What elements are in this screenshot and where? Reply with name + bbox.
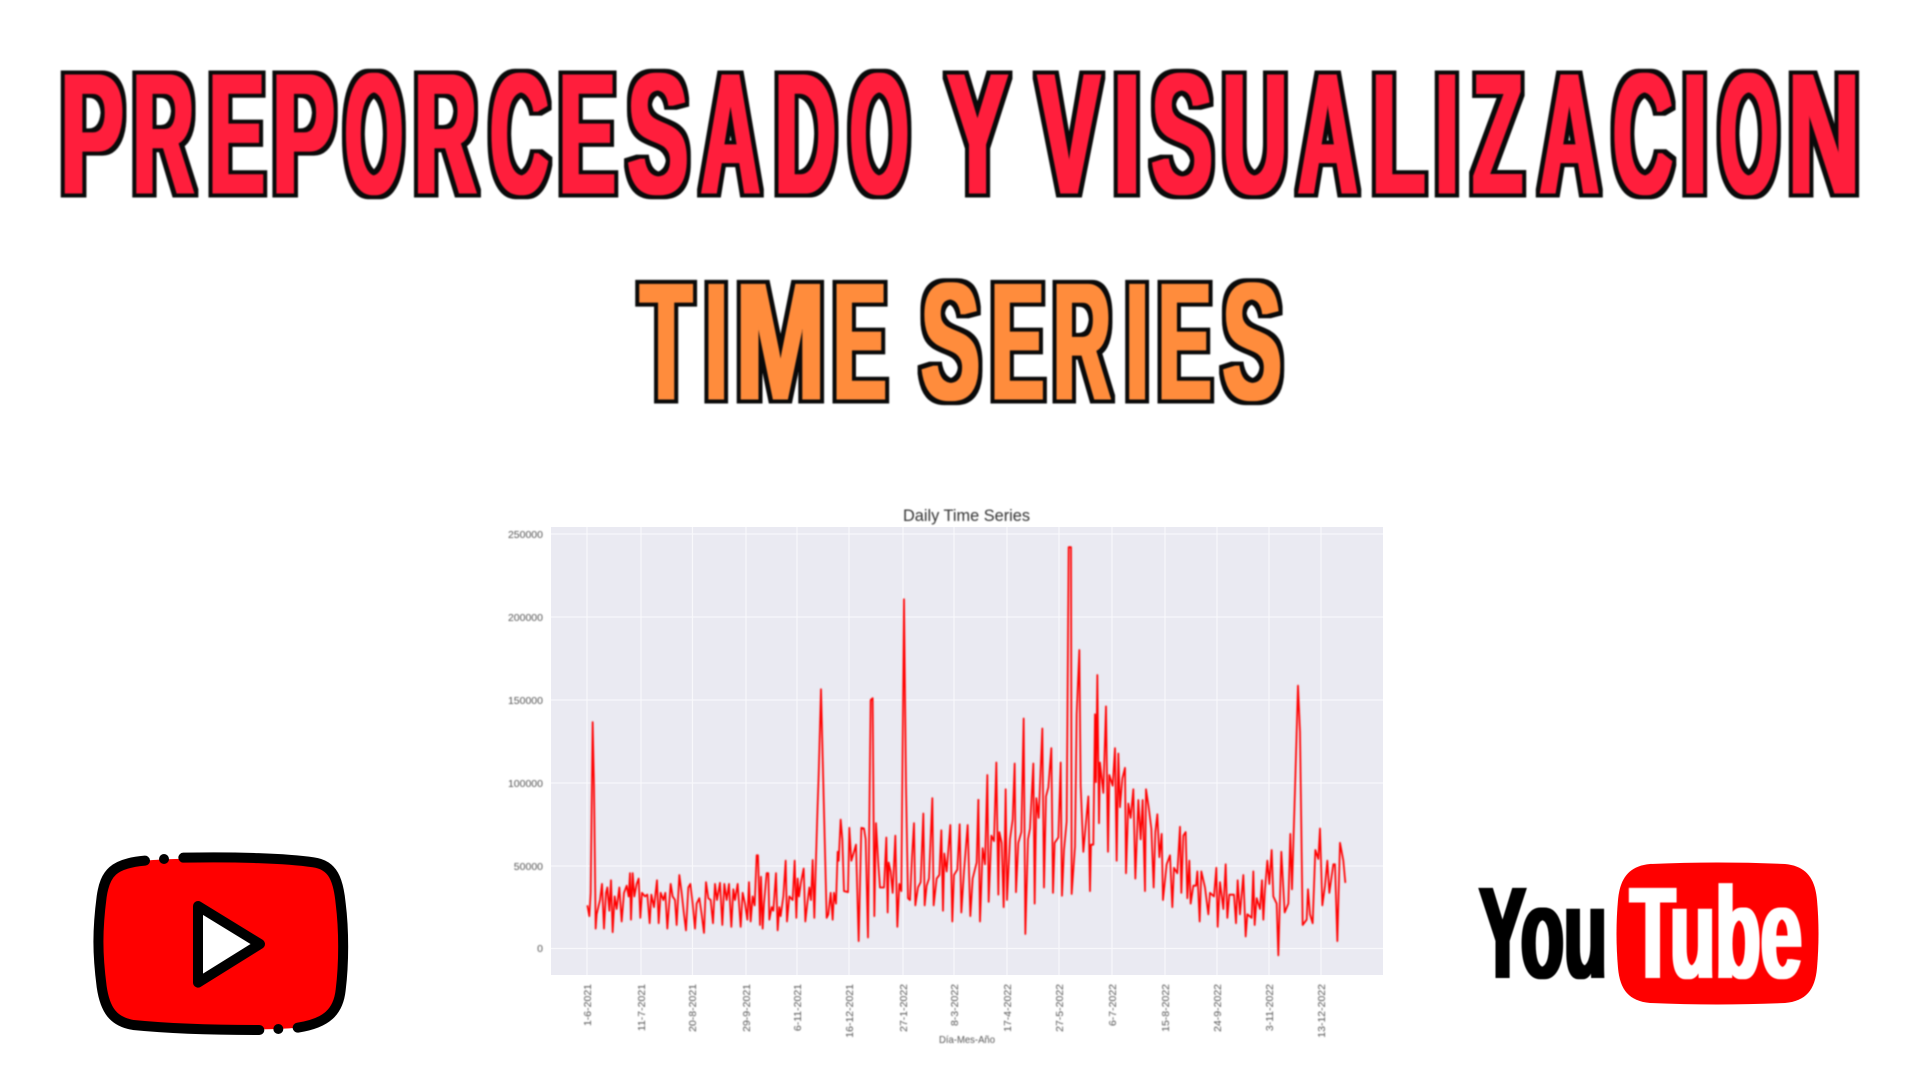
x axis labels: 1-6-2021 (582, 984, 594, 1026)
y axis title: Ventas (497, 735, 509, 767)
title: Preporcesado y Visualizacion: L (1372, 36, 1425, 230)
logo: YouTube (1479, 859, 1818, 1006)
subtitle: Time Series (640, 248, 1282, 436)
subtitle: Time Series: E (833, 248, 886, 436)
icon outline (98, 857, 343, 1030)
title: Preporcesado y Visualizacion: U (1222, 36, 1288, 230)
x axis labels: 20-8-2021 (687, 984, 699, 1032)
title: Preporcesado y Visualizacion: P (272, 36, 335, 230)
x axis labels: 17-4-2022 (1002, 984, 1014, 1032)
subtitle: Time Series: E (1158, 248, 1211, 436)
y axis labels: 200000 (508, 612, 543, 624)
data line (587, 547, 1345, 955)
y axis labels: 0 (537, 943, 543, 955)
x axis labels: 13-12-2022 (1316, 984, 1328, 1038)
title: Preporcesado y Visualizacion: E (209, 36, 264, 230)
title: Preporcesado y Visualizacion: N (1788, 36, 1860, 230)
title: Preporcesado y Visualizacion: C (1613, 36, 1673, 230)
logo red badge (1616, 862, 1818, 1004)
subtitle: Time Series: I (1126, 248, 1149, 436)
x axis labels: 27-5-2022 (1054, 984, 1066, 1032)
title: Preporcesado y Visualizacion: A (1298, 36, 1358, 230)
x axis labels: 15-8-2022 (1160, 984, 1172, 1032)
title: Preporcesado y Visualizacion: V (1038, 36, 1100, 230)
subtitle: Time Series: S (1222, 248, 1282, 436)
title: Preporcesado y Visualizacion: R (414, 36, 477, 230)
subtitle: Time Series: M (736, 248, 825, 436)
x axis labels (582, 984, 1328, 1038)
subtitle: Time Series: I (705, 248, 728, 436)
x axis labels: 8-3-2022 (949, 984, 961, 1026)
y axis labels: 100000 (508, 778, 543, 790)
icon body (98, 858, 343, 1029)
y axis labels: 50000 (514, 861, 543, 873)
x axis labels: 27-1-2022 (898, 984, 910, 1032)
title: Preporcesado y Visualizacion: O (1719, 36, 1778, 230)
title: Preporcesado y Visualizacion: S (627, 36, 688, 230)
title: Preporcesado y Visualizacion: A (1540, 36, 1599, 230)
title: Preporcesado y Visualizacion: C (490, 36, 549, 230)
plot area (551, 527, 1383, 975)
title: Preporcesado y Visualizacion: P (60, 36, 124, 230)
x axis title: Día-Mes-Año (939, 1034, 995, 1046)
title: Preporcesado y Visualizacion: S (1151, 36, 1213, 230)
title: Preporcesado y Visualizacion: Z (1473, 36, 1523, 230)
title: Preporcesado y Visualizacion: E (559, 36, 616, 230)
x axis labels: 29-9-2021 (741, 984, 753, 1032)
title: Preporcesado y Visualizacion (60, 36, 1860, 230)
title: Preporcesado y Visualizacion: A (701, 36, 760, 230)
subtitle: Time Series: E (991, 248, 1044, 436)
subtitle: Time Series: R (1053, 248, 1111, 436)
y axis labels (508, 529, 543, 955)
title: Preporcesado y Visualizacion: I (1682, 36, 1707, 230)
title: Preporcesado y Visualizacion: D (775, 36, 836, 230)
x axis labels: 11-7-2021 (636, 984, 648, 1031)
title: Preporcesado y Visualizacion: O (345, 36, 403, 230)
chart: daily time series (497, 507, 1383, 1046)
title: Preporcesado y Visualizacion: I (1435, 36, 1459, 230)
subtitle: Time Series: T (640, 248, 692, 436)
title: Preporcesado y Visualizacion: R (133, 36, 194, 230)
x axis labels: 3-11-2022 (1264, 984, 1276, 1031)
subtitle: Time Series: S (921, 248, 980, 436)
title: Preporcesado y Visualizacion: O (850, 36, 909, 230)
title: Preporcesado y Visualizacion: I (1113, 36, 1141, 230)
chart title: Daily Time Series (903, 507, 1030, 525)
y axis labels: 250000 (508, 529, 543, 541)
y axis labels: 150000 (508, 695, 543, 707)
x axis labels: 6-11-2021 (792, 984, 804, 1031)
x axis labels: 24-9-2022 (1212, 984, 1224, 1032)
x axis labels: 6-7-2022 (1107, 984, 1119, 1026)
x axis labels: 16-12-2021 (844, 984, 856, 1038)
icon: play button (98, 854, 343, 1034)
logo word: You: You (1479, 859, 1607, 1006)
title: Preporcesado y Visualizacion: Y (947, 36, 1008, 230)
